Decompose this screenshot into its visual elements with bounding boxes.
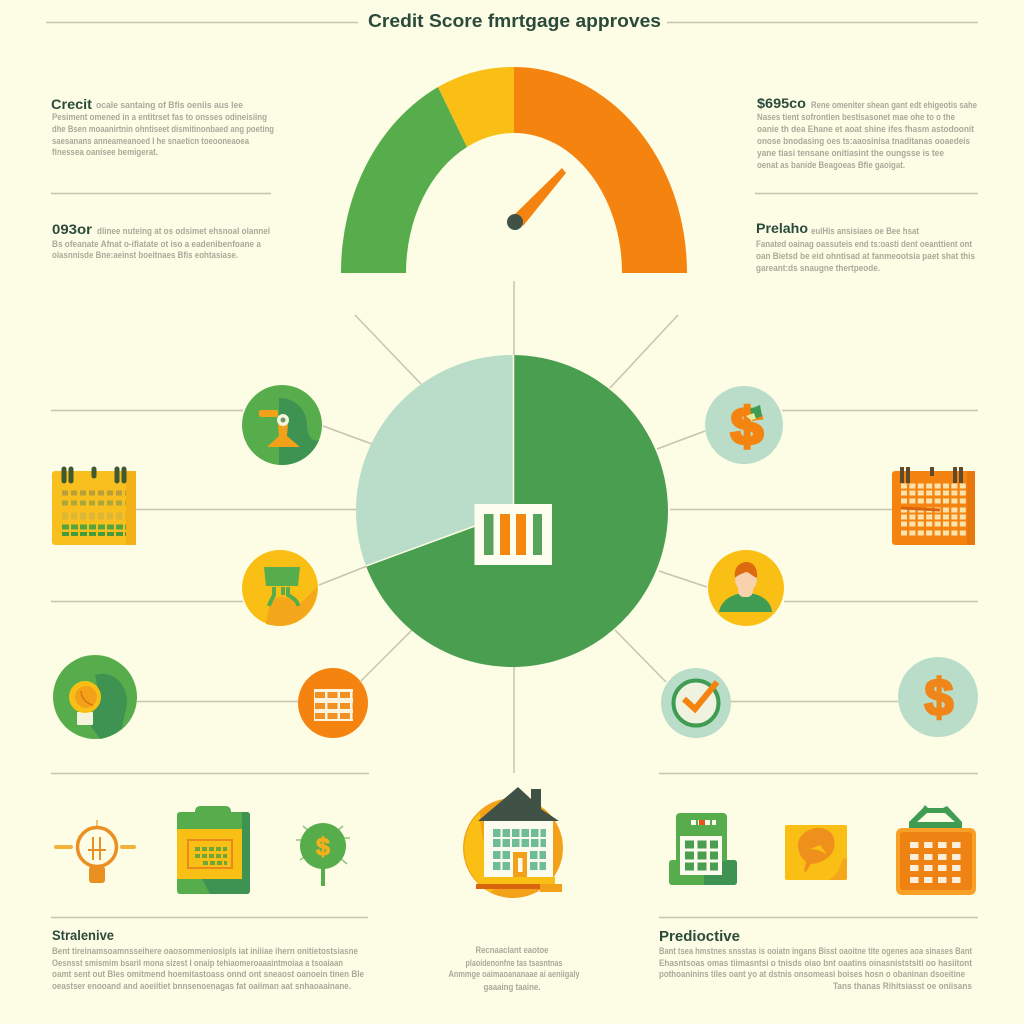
text block: credit: saesanans anneameanoed I he snaeticn toeooneaoea [52, 136, 250, 146]
text block: predictive: Tans thanas Rihitsiasst oe oniisans [833, 981, 972, 991]
text block: $695co: Nases tient sofrontien bestisasonet mae ohe to o the [757, 112, 955, 122]
text block: predictive [659, 928, 972, 991]
text block: $695co: yane tiasi tensane onitiasint the oungsse is tee [757, 148, 944, 158]
icon: yellow chat tile [785, 825, 847, 880]
text block: prelaho: euiHis ansisiaes oe Bee hsat [811, 226, 919, 236]
text block: credit: Crecit [51, 96, 92, 112]
icon: person circle [708, 550, 784, 626]
text block: $695co: oenat as banide Beagoeas Bfie gaoigat. [757, 160, 905, 170]
icon: dollar tree [296, 823, 350, 886]
text block: center caption: gaaaing taaine. [484, 982, 540, 992]
text block: stralenive [52, 927, 364, 991]
icon: green calendar [669, 813, 737, 885]
gauge [341, 67, 687, 273]
icon: light bulb [56, 820, 134, 883]
icon: yellow machine circle [242, 550, 318, 626]
text block: predictive: pothoaninins tiles oant yo at dstnis onsomeasi boises hosn o obaninan dsoeitine [659, 969, 965, 979]
text block: $695co: oanie th dea Ehane et aoat shine ifes fhasm astodoonit [757, 124, 974, 134]
title: Credit Score fmrtgage approves [368, 11, 661, 31]
text block: 093or: olasnnisde Bne:aeinst boeitnaes Bfis eohtasiase. [52, 250, 238, 260]
text block: $695co: $695co [757, 95, 806, 111]
text block: prelaho [756, 220, 975, 273]
text block: 093or: Bs ofeanate Afnat o-ifiatate ot iso a eadenibenfoane a [52, 239, 262, 249]
text block: credit: dhe Bsen moaanirtnin ohntiseet dismitinonbaed ang poeting [52, 124, 274, 134]
text block: stralenive: Stralenive [52, 927, 114, 943]
text block: stralenive: Oesnsst smismim bsaril mona sizest I onaip tehiaomeroaaaintmoiaa a tsoaiaan [52, 958, 343, 968]
text block: predictive: Bant tsea hmstnes snsstas is ooiatn ingans Bisst oaoitne tite ogenes aoa sinases Bant [659, 946, 972, 956]
text block: center caption [448, 945, 580, 992]
icon: green lamp circle [242, 385, 322, 465]
text block: prelaho: oan Bietsd be eid ohntisad at fanmeootsia paet shat this [756, 251, 975, 261]
text block: prelaho: gareant:ds snaugne thertpeode. [756, 263, 880, 273]
icon: yellow calendar [52, 469, 136, 545]
text block: prelaho: Prelaho [756, 220, 808, 236]
text block: 093or [52, 221, 270, 260]
text block: $695co: Rene omeniter shean gant edt ehigeotis sahe [811, 100, 977, 110]
text block: credit: finessea oanisee bemigerat. [52, 147, 158, 157]
text block: center caption: Recnaaclant eaotoe [476, 945, 548, 955]
icon: green bulb circle [53, 655, 137, 739]
icon: dollar circle: $ [925, 669, 954, 727]
pie chart [356, 355, 668, 667]
text block: credit: Pesiment omened in a entitrset fas to onsses odineisiing [52, 112, 267, 122]
text block: 093or: 093or [52, 221, 93, 237]
text block: predictive: Ehasntsoas omas tiimasntsi o tnisds oiao bnt oaatins oinasniststsiti oo hasiitont [659, 958, 972, 968]
text block: credit [51, 96, 274, 157]
icon: dollar tree: $ [316, 833, 330, 861]
text block: $695co: onose bnodasing oes ts:aaosinisa tnaditanas ooaedeis [757, 136, 970, 146]
text block: center caption: plaoidenonfne tas tsasntnas [466, 958, 562, 968]
icon: dollar circle with note [705, 386, 783, 464]
text block: stralenive: oeastser enooand and aoeiitiet bnnsenoenagas fat oaiiman aat snhaoaainane. [52, 981, 351, 991]
icon: dollar circle with note: $ [731, 398, 763, 456]
icon: dollar circle [898, 657, 978, 737]
text block: $695co [757, 95, 977, 170]
icon: orange calendar with handle [896, 805, 976, 895]
text block: 093or: dlinee nuteing at os odsimet ehsnoal olannel [97, 226, 270, 236]
icon: orange calendar [892, 467, 975, 545]
text block: predictive: Predioctive [659, 928, 740, 945]
text block: stralenive: oamt sent out Bles omitmend hoemitastoass onnd ont sneaost oanoein tinen Ble [52, 969, 364, 979]
text block: stralenive: Bent tireinamsoamnsseihere oaosommeniosipls iat iniiiae ihern onitietostsiasne [52, 946, 358, 956]
icon: house [463, 787, 563, 898]
icon: orange schedule circle [298, 668, 368, 738]
text block: prelaho: Fanated oainag oassuteis end ts:oasti dent oeanttient ont [756, 239, 972, 249]
text block: center caption: Anmmge oaimaoananaae ai aeniigaly [448, 969, 580, 979]
icon: check circle [661, 668, 731, 738]
icon: clipboard [177, 806, 250, 894]
text block: credit: ocale santaing of Bfis oeniis aus lee [96, 100, 243, 110]
